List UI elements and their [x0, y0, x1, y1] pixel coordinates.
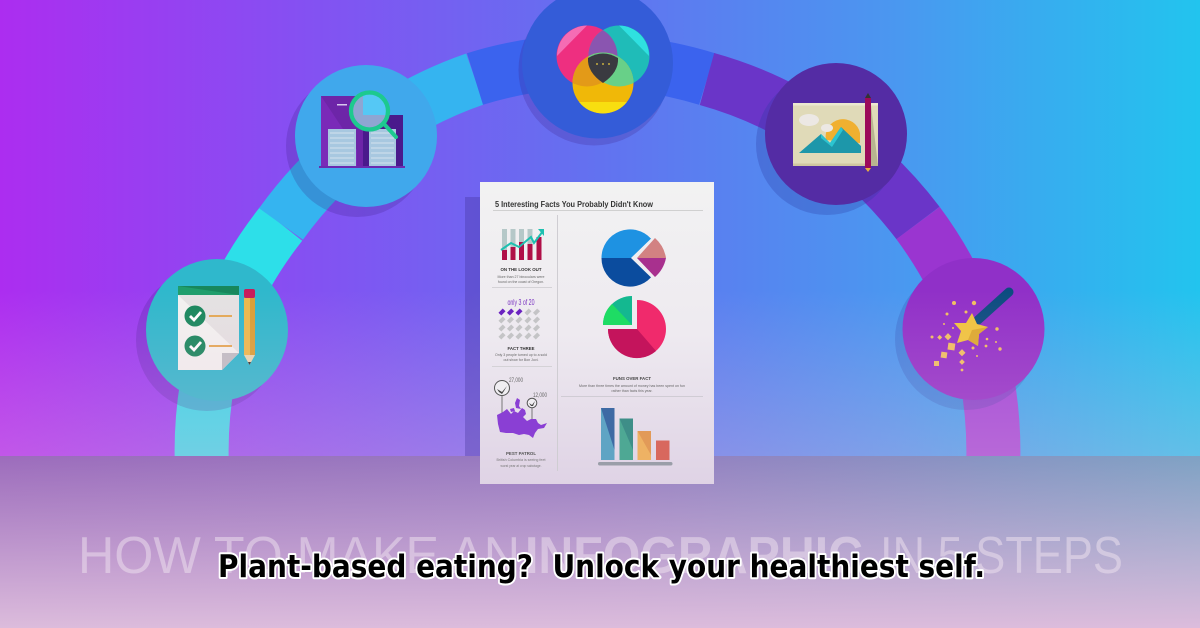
lower fade overlay	[0, 290, 1200, 456]
step 3 circle: venn diagram	[518, 0, 673, 146]
fact three: Only 3 people turned up to a sold	[495, 353, 547, 357]
fact: pest patrol: PEST PATROL	[506, 451, 536, 457]
icon: pencil	[244, 289, 255, 365]
step 5 circle: magic wand	[895, 258, 1044, 410]
icon: sparkles	[930, 301, 1002, 371]
bar chart	[598, 408, 672, 466]
fact: on the look out	[498, 267, 544, 284]
step 1 circle: checklist	[136, 259, 288, 411]
pie chart: pink	[603, 296, 666, 358]
floor	[0, 456, 1200, 628]
fact: funs over fact: FUNS OVER FACT	[613, 376, 651, 382]
fact: on the look out: ON THE LOOK OUT	[500, 267, 542, 272]
icon: picture	[793, 103, 878, 166]
icon: star	[954, 313, 988, 346]
fact: on the look out: found on the coast of Oregon.	[498, 280, 544, 284]
faded headline: HOW TO MAKE AN	[78, 527, 520, 585]
infographic card	[480, 182, 714, 484]
fact three	[495, 346, 547, 362]
fact: on the look out: More than 27 binoculars were	[498, 275, 544, 279]
card title: 5 Interesting Facts You Probably Didn't Know	[495, 200, 654, 209]
faded headline	[78, 527, 1123, 585]
fact: funs over fact: More than three times the amount of money has been spent on fun	[579, 384, 685, 388]
pie chart: blue	[601, 229, 666, 287]
icon: magnifier	[351, 92, 396, 137]
step 2 circle: research	[286, 65, 437, 217]
icon: checklist paper	[178, 286, 239, 370]
fact: funs over fact: rather than facts this year.	[612, 389, 652, 393]
fact: pest patrol	[496, 451, 546, 468]
fact: funs over fact	[579, 376, 685, 393]
chart: rising bars	[501, 229, 544, 260]
fact: only 3 of 20	[498, 298, 540, 340]
map: pest patrol: 27,000	[509, 378, 523, 384]
card shadow	[465, 197, 485, 456]
icon: wand	[978, 292, 1009, 320]
icon: venn circles	[556, 26, 650, 114]
faded headline: IN 5 STEPS	[880, 527, 1123, 585]
map: pest patrol	[494, 378, 547, 438]
faded headline: INFOGRAPHIC	[525, 527, 863, 585]
step 4 circle: image sketch	[756, 63, 907, 215]
fact: pest patrol: worst year at crop sabotage.	[500, 464, 542, 468]
fact three: FACT THREE	[508, 346, 535, 352]
caption: Plant-based eating? Unlock your healthiest self.	[218, 549, 985, 585]
icon: pencil	[865, 93, 871, 172]
map: pest patrol: 12,000	[533, 393, 547, 399]
fact three: out show for Bon Jovi.	[504, 358, 538, 362]
arc path	[202, 61, 993, 470]
icon: documents	[319, 96, 405, 168]
fact: pest patrol: British Columbia is seeing feet	[496, 458, 546, 462]
fact: only 3 of 20: only 3 of 20	[508, 298, 535, 307]
